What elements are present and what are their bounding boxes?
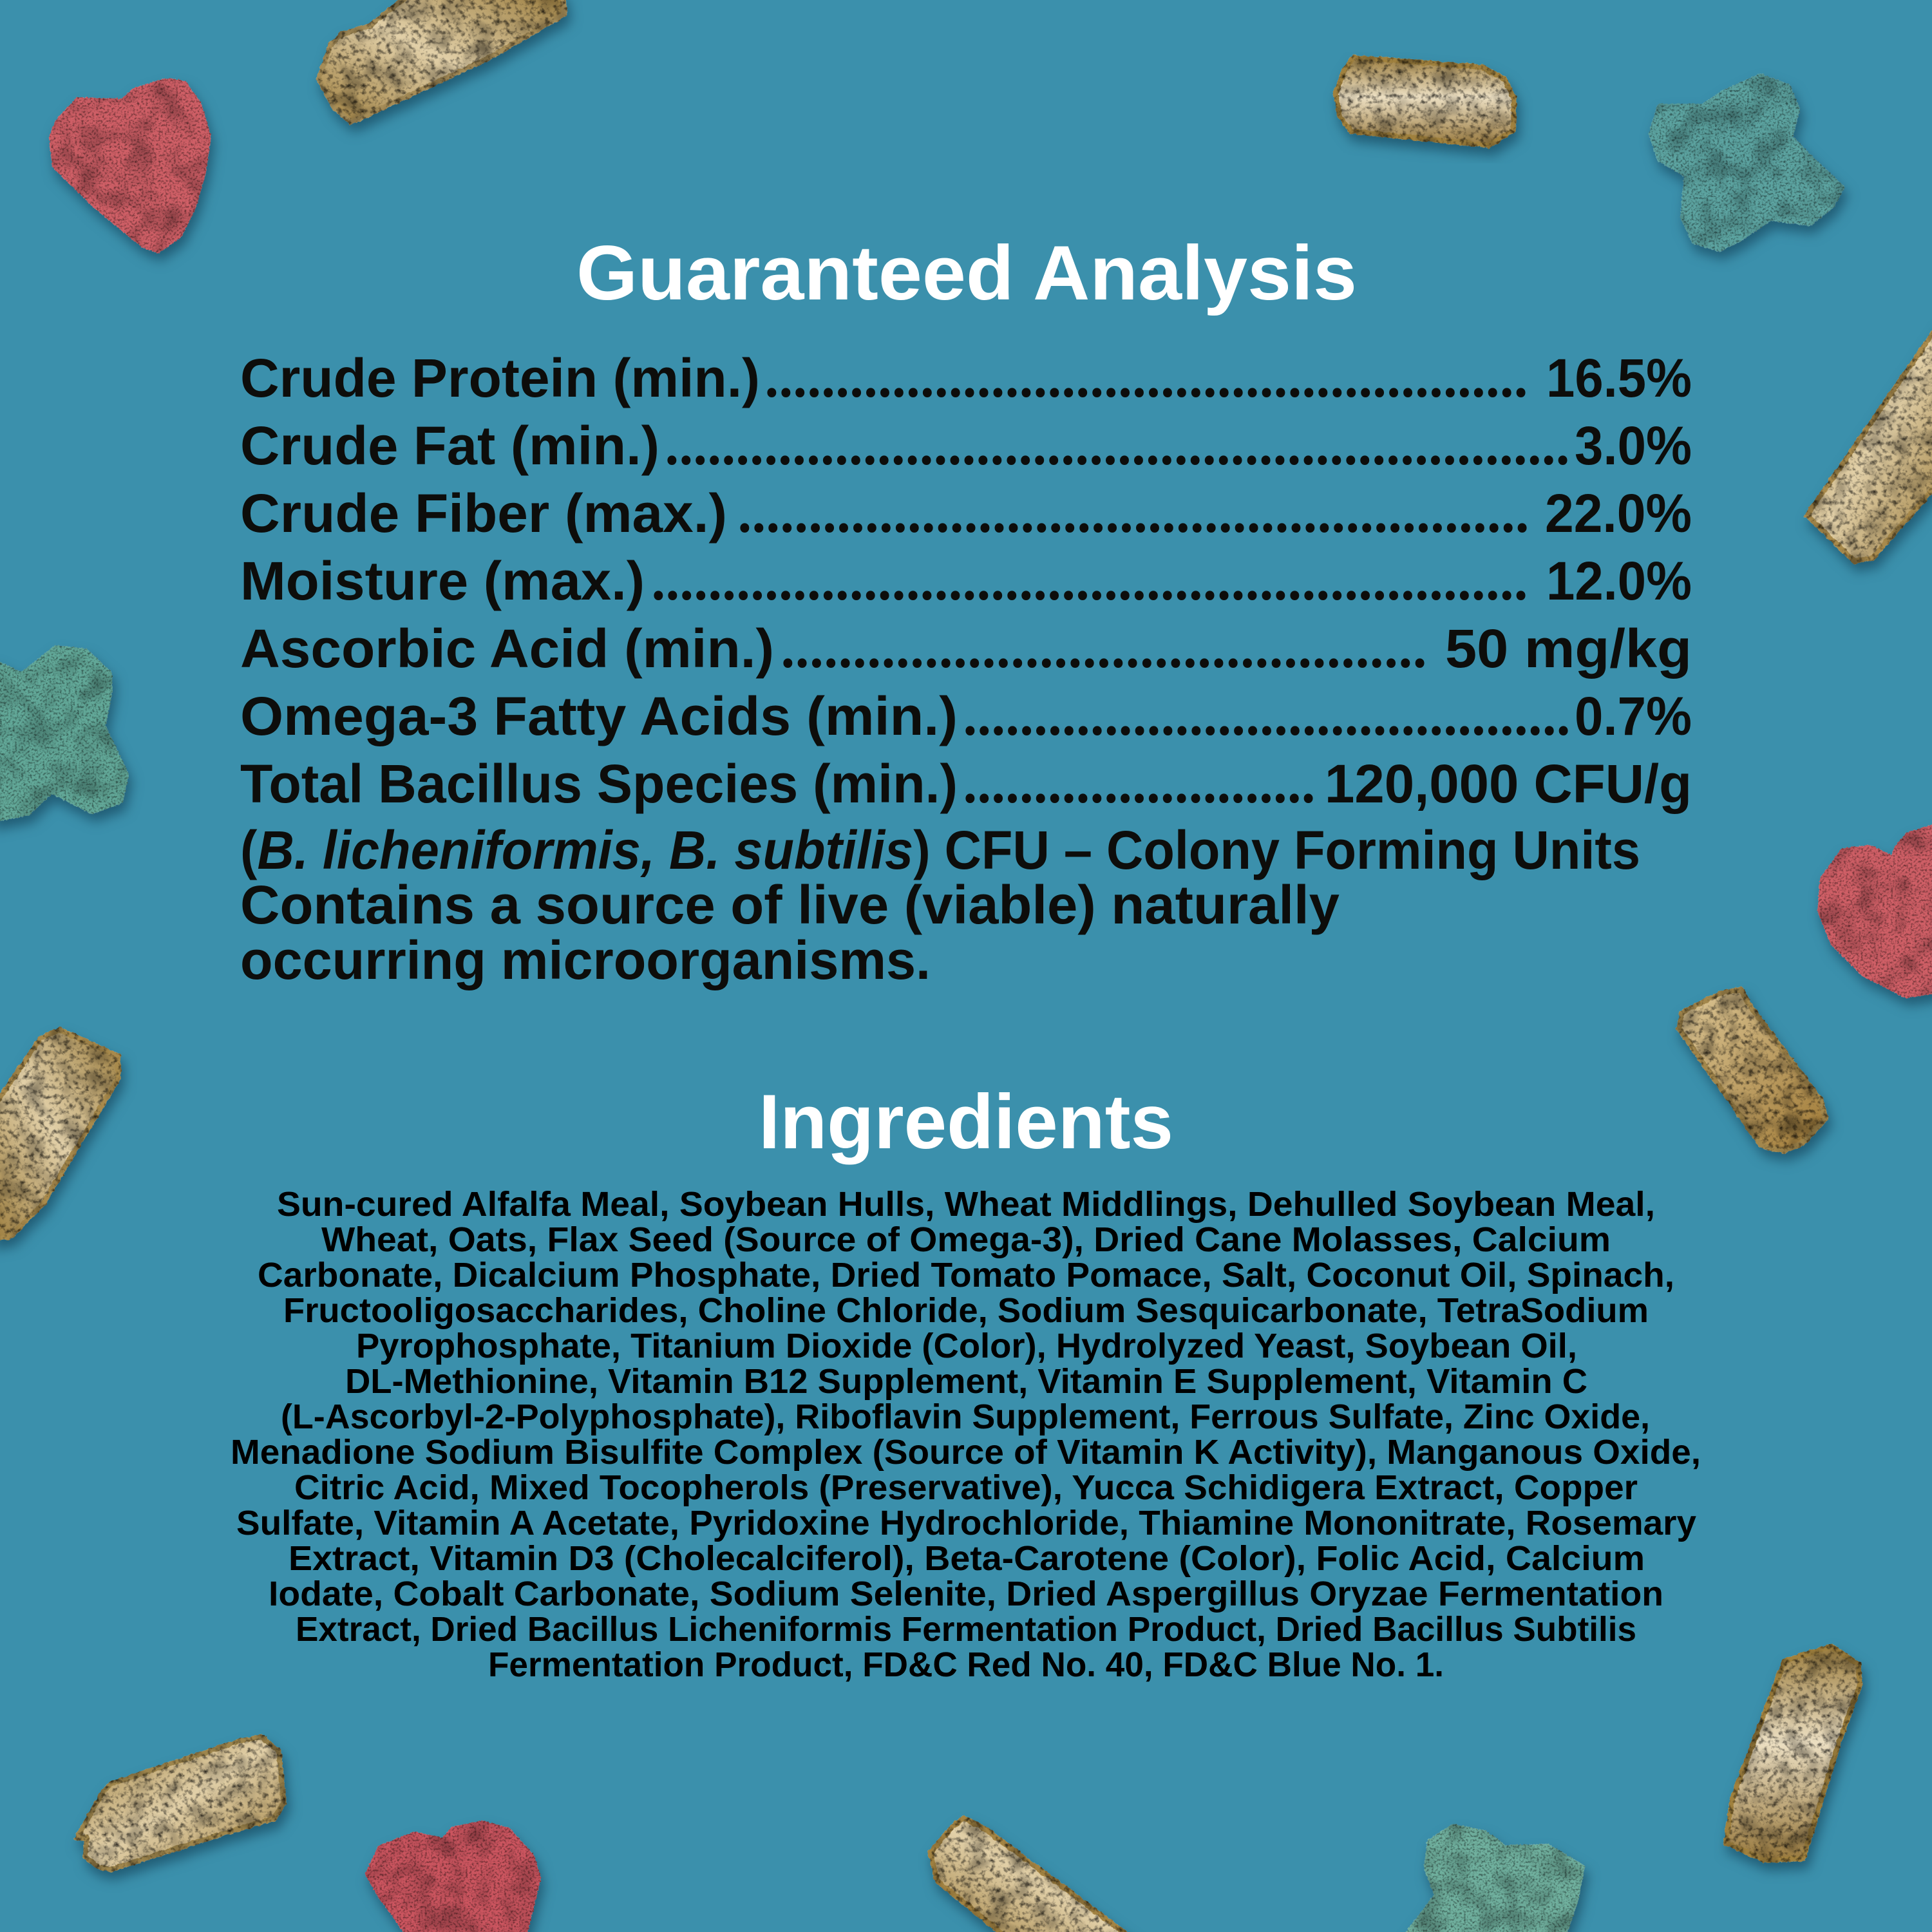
row: omega-3 fatty acids: Omega-3 Fatty Acids (min.) [240,686,958,746]
row: omega-3 fatty acids: ........................................... [962,678,1571,749]
row: ascorbic acid: 50 mg/kg [1445,618,1692,679]
text block: ingredients list: Citric Acid, Mixed Tocopherols (Preservative), Yucca Schidigera Extract, Copper [294,1468,1638,1507]
row: omega-3 fatty acids: 0.7% [1575,686,1692,746]
row: moisture: .............................................................. [650,543,1529,614]
row: crude protein: Crude Protein (min.) [240,348,760,408]
row: ascorbic acid: ............................................. [780,611,1428,681]
row: moisture: Moisture (max.) [240,551,645,611]
text block: ingredients list: Fermentation Product, FD&C Red No. 40, FD&C Blue No. 1. [488,1645,1444,1684]
row: crude fat: 3.0% [1575,415,1692,476]
kibble: green cross bottom [1404,1826,1582,1932]
note: colony forming units: occurring microorganisms. [240,930,931,990]
row: omega-3 fatty acids [240,678,1692,749]
text block: ingredients list: Extract, Vitamin D3 (Cholecalciferol), Beta-Carotene (Color), Folic Acid, Calcium [289,1539,1645,1578]
text block: ingredients list: Pyrophosphate, Titanium Dioxide (Color), Hydrolyzed Yeast, Soybean Oil, [356,1327,1577,1365]
kibble: tan pellet right middle [1679,989,1826,1151]
title: Guaranteed Analysis: Guaranteed Analysis [576,230,1357,316]
text block: ingredients list: Iodate, Cobalt Carbonate, Sodium Selenite, Dried Aspergillus Oryzae Fermentation [269,1575,1663,1613]
row: moisture: 12.0% [1546,551,1692,611]
note: colony forming units: (B. licheniformis, B. subtilis) CFU – Colony Forming Units [240,820,1640,880]
row: total bacillus species: 120,000 CFU/g [1325,753,1692,814]
row: total bacillus species: ......................... [962,746,1316,817]
row: crude fat [240,408,1692,478]
note: colony forming units: Contains a source of live (viable) naturally [240,875,1340,935]
text block: ingredients list [231,1185,1701,1684]
row: crude protein: 16.5% [1546,348,1692,408]
row: crude protein: ...................................................... [764,340,1529,411]
row: moisture [240,543,1692,614]
kibble: green cross left edge [0,648,126,820]
kibble: tan pellet top right [1336,57,1514,146]
kibble: red heart bottom [368,1824,538,1932]
text block: ingredients list: Wheat, Oats, Flax Seed (Source of Omega-3), Dried Cane Molasses, Calcium [321,1220,1611,1259]
kibble: tan pellet right edge [1807,325,1932,562]
kibble: tan pellet bottom right [1726,1646,1860,1861]
note: colony forming units [240,820,1640,990]
kibble: green cross top right [1651,76,1842,249]
text block: ingredients list: DL-Methionine, Vitamin B12 Supplement, Vitamin E Supplement, Vitamin C [345,1362,1587,1401]
text block: ingredients list: Extract, Dried Bacillus Licheniformis Fermentation Product, Dried Bacillus Subtilis [296,1610,1636,1649]
text block: ingredients list: Fructooligosaccharides, Choline Chloride, Sodium Sesquicarbonate, TetraSodium [283,1291,1649,1330]
row: crude protein [240,340,1692,411]
kibble: tan pellet left edge [0,1030,118,1240]
row: crude fat: ................................................................ [664,408,1571,478]
kibble: red heart top left [52,82,208,250]
heading: Ingredients: Ingredients [759,1079,1173,1165]
row: crude fiber [240,475,1692,546]
kibble: tan pellet bottom left [77,1737,284,1870]
row: crude fiber: ........................................................ [737,475,1530,546]
row: ascorbic acid [240,611,1692,681]
row: total bacillus species [240,746,1692,817]
text block: ingredients list: Menadione Sodium Bisulfite Complex (Source of Vitamin K Activity), Manganous Oxide, [231,1433,1701,1472]
text block: ingredients list: Sun-cured Alfalfa Meal, Soybean Hulls, Wheat Middlings, Dehulled Soybean Meal, [277,1185,1655,1224]
text block: ingredients list: (L-Ascorbyl-2-Polyphosphate), Riboflavin Supplement, Ferrous Sulfate, Zinc Oxide, [281,1397,1650,1436]
kibble: tan pellet bottom center [931,1818,1132,1932]
kibble: tan pellet top left [319,0,565,122]
row: crude fiber: Crude Fiber (max.) [240,483,727,544]
text block: ingredients list: Sulfate, Vitamin A Acetate, Pyridoxine Hydrochloride, Thiamine Mononitrate, Rosemary [236,1504,1696,1542]
row: total bacillus species: Total Bacillus Species (min.) [240,753,958,814]
row: ascorbic acid: Ascorbic Acid (min.) [240,618,774,679]
text block: ingredients list: Carbonate, Dicalcium Phosphate, Dried Tomato Pomace, Salt, Coconut Oil, Spinach, [258,1256,1674,1294]
row: crude fat: Crude Fat (min.) [240,415,659,476]
kibble: red heart right edge [1821,826,1932,995]
row: crude fiber: 22.0% [1545,483,1692,544]
panel: guaranteed analysis table [240,340,1692,990]
